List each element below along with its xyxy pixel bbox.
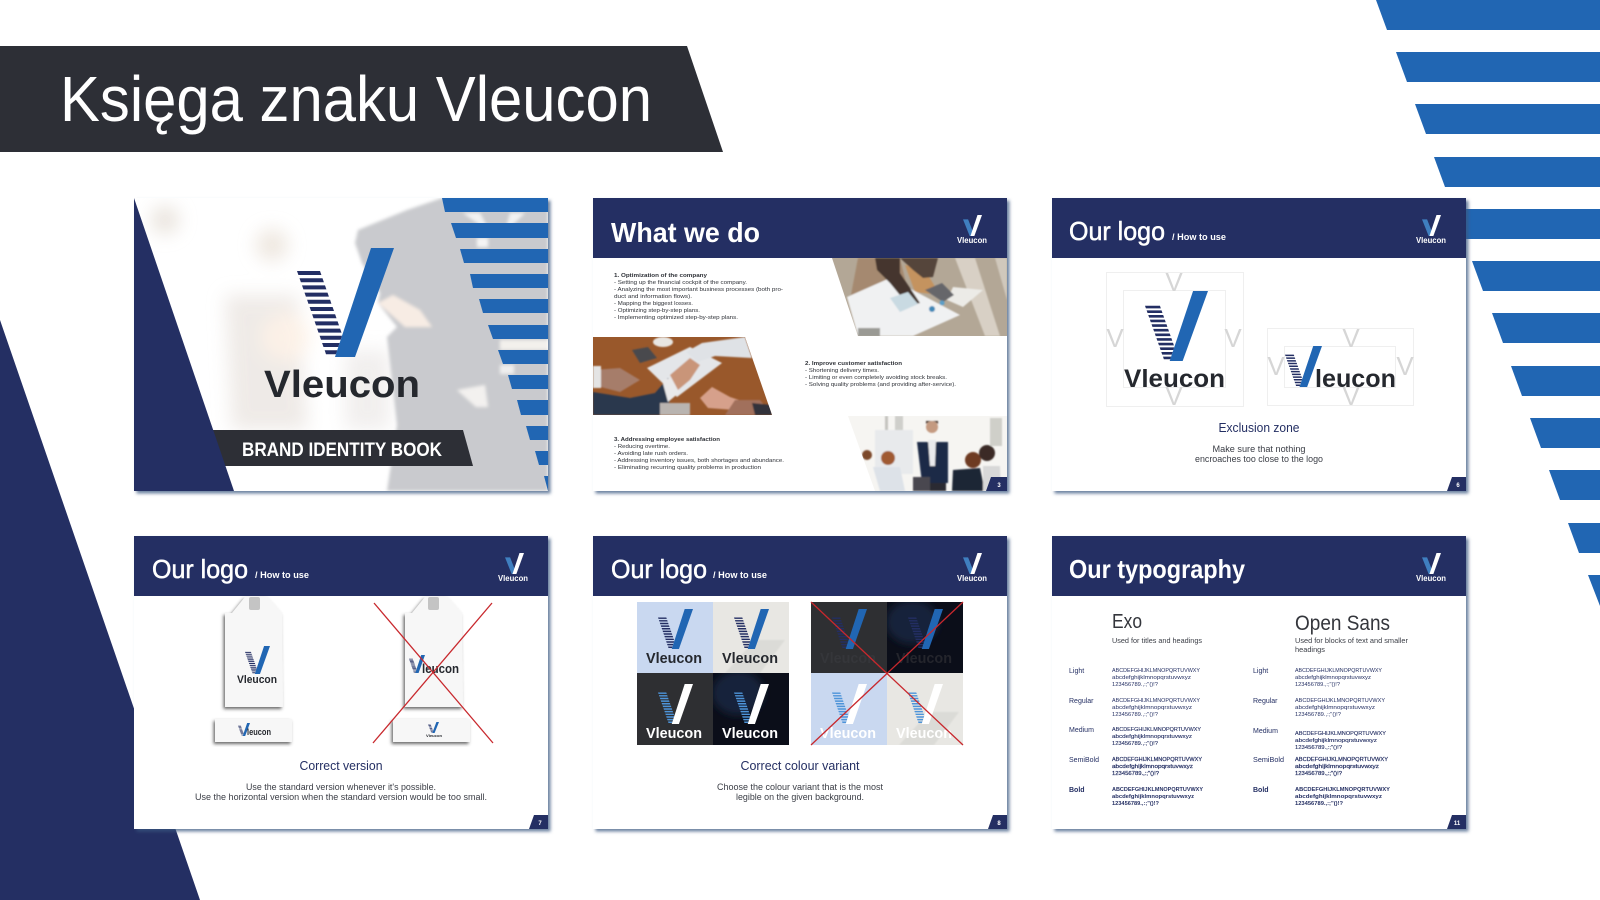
header bar <box>593 536 1007 596</box>
mockup: correct small card: leucon <box>247 727 271 737</box>
icon: mini logo <box>957 553 987 583</box>
body text: encroaches too close to the logo <box>1195 454 1323 464</box>
body text: legible on the given background. <box>736 792 864 802</box>
font column: Exo: 123456789.,:;"()!? <box>1112 712 1158 718</box>
panel: our logo correct version <box>134 536 548 829</box>
icon: mini logo <box>957 215 987 245</box>
text block: customer satisfaction <box>805 361 956 388</box>
font column: Exo: Medium <box>1069 727 1094 734</box>
page number tab: 11 <box>1454 821 1461 827</box>
exclusion diagram: vertical logo: V <box>1165 267 1183 297</box>
font column: Exo: abcdefghijklmnopqrstuvwxyz <box>1112 764 1193 770</box>
decoration: blue stripes top-right <box>1376 0 1600 606</box>
mockup: incorrect small card <box>393 719 470 742</box>
font column: Open Sans: Medium <box>1253 728 1278 735</box>
font column: Exo: Bold <box>1069 787 1085 794</box>
text block: optimization: - Analyzing the most important business processes (both pro- <box>614 287 783 293</box>
font column: Open Sans: ABCDEFGHIJKLMNOPQRTUVWXY <box>1295 757 1388 763</box>
font column: Open Sans: Bold <box>1253 787 1269 794</box>
page number tab <box>988 815 1007 829</box>
font column: Open Sans: ABCDEFGHIJKLMNOPQRTUVWXY <box>1295 731 1386 737</box>
body text <box>717 782 883 802</box>
panel: our logo colour variant <box>593 536 1007 829</box>
heading: our logo: Our logo <box>1069 216 1165 246</box>
header bar <box>134 536 548 596</box>
font column: Exo: abcdefghijklmnopqrstuvwxyz <box>1112 734 1192 740</box>
heading: our logo: Our logo <box>611 554 707 584</box>
heading: our logo <box>152 554 309 584</box>
icon: mini logo: Vleucon <box>498 573 528 583</box>
mockup: correct small card <box>215 719 292 742</box>
font column: Exo: 123456789.,:;"()!? <box>1112 771 1159 777</box>
font column: Open Sans: abcdefghijklmnopqrstuvwxyz <box>1295 738 1377 744</box>
font column: Exo: ABCDEFGHIJKLMNOPQRTUVWXY <box>1112 787 1203 793</box>
text block: employee satisfaction: 3. Addressing employee satisfaction <box>614 437 720 443</box>
text block: employee satisfaction: - Eliminating recurring quality problems in production <box>614 465 761 471</box>
panel: our logo exclusion zone <box>1052 198 1466 491</box>
exclusion diagram: horizontal logo <box>1267 323 1414 411</box>
font column: Exo: Light <box>1069 668 1084 675</box>
heading: our logo: Our logo <box>152 554 248 584</box>
text block: customer satisfaction: - Limiting or even completely avoiding stock breaks. <box>805 375 947 381</box>
logo wordmark: Vleucon <box>264 364 420 406</box>
font column: Exo: 123456789.,:;"()!? <box>1112 801 1160 807</box>
text block: employee satisfaction <box>614 437 784 471</box>
font column: Exo <box>1069 611 1203 807</box>
heading: our logo <box>611 554 767 584</box>
page number tab: 8 <box>997 821 1001 827</box>
icon: mini logo <box>498 553 528 583</box>
page number tab <box>1447 815 1466 829</box>
body text: Use the horizontal version when the standard version would be too small. <box>195 792 487 802</box>
exclusion diagram: vertical logo: V <box>1106 323 1124 353</box>
page number tab <box>986 477 1007 491</box>
logo grid: incorrect variants: Vleucon <box>896 725 952 742</box>
text block: customer satisfaction: - Solving quality problems (and providing after-service). <box>805 382 956 388</box>
icon: Vleucon logo mark <box>297 248 394 357</box>
font column: Exo: Regular <box>1069 698 1094 705</box>
font column: Open Sans: ABCDEFGHIJKLMNOPQRTUVWXY <box>1295 698 1385 704</box>
icon: mini logo: Vleucon <box>957 573 987 583</box>
body text <box>195 782 487 802</box>
font column: Open Sans: Regular <box>1253 698 1278 705</box>
decoration: navy triangle bottom-left <box>0 320 200 900</box>
heading: our logo: / How to use <box>713 570 767 581</box>
text block: customer satisfaction: 2. Improve customer satisfaction <box>805 361 902 367</box>
icon: mini logo: Vleucon <box>1416 235 1446 245</box>
font column: Open Sans: abcdefghijklmnopqrstuvwxyz <box>1295 764 1379 770</box>
title banner <box>0 46 723 152</box>
exclusion diagram: horizontal logo: V <box>1267 351 1285 381</box>
page number tab: 3 <box>997 483 1001 489</box>
icon: mini logo <box>1416 215 1446 245</box>
font column: Exo: abcdefghijklmnopqrstuvwxyz <box>1112 675 1191 681</box>
font column: Exo: ABCDEFGHIJKLMNOPQRTUVWXY <box>1112 668 1200 674</box>
exclusion diagram: vertical logo: V <box>1224 323 1242 353</box>
font column: Exo: Exo <box>1112 611 1142 633</box>
band: brand identity book: BRAND IDENTITY BOOK <box>242 440 442 461</box>
font column: Open Sans: abcdefghijklmnopqrstuvwxyz <box>1295 675 1371 681</box>
text block: optimization: 1. Optimization of the company <box>614 273 708 279</box>
font column: Open Sans: 123456789.,:;"()!? <box>1295 801 1344 807</box>
red cross <box>811 602 963 745</box>
subheading: correct version: Correct version <box>300 759 383 773</box>
panel: what we do <box>593 198 1008 492</box>
text block: optimization: - Implementing optimized step-by-step plans. <box>614 315 738 321</box>
heading: what we do: What we do <box>611 217 760 248</box>
font column: Open Sans: SemiBold <box>1253 757 1284 764</box>
mockup: incorrect badge <box>405 597 463 707</box>
exclusion diagram: horizontal logo: V <box>1396 351 1414 381</box>
logo grid: correct variants: Vleucon <box>722 650 778 667</box>
font column: Exo: 123456789.,:;"()!? <box>1112 682 1158 688</box>
photo: handshake <box>593 337 773 415</box>
font column: Exo: ABCDEFGHIJKLMNOPQRTUVWXY <box>1112 698 1200 704</box>
mockup: incorrect small card: Vleucon <box>426 733 443 738</box>
mockup: incorrect badge: leucon <box>422 661 459 676</box>
exclusion diagram: vertical logo: V <box>1165 381 1183 411</box>
logo grid: incorrect variants: Vleucon <box>820 725 876 742</box>
photo: documents on floor <box>830 258 1008 336</box>
logo grid: incorrect variants <box>811 600 963 745</box>
header bar <box>593 198 1007 258</box>
band: brand identity book <box>210 430 473 466</box>
text block: optimization: - Optimizing step-by-step plans. <box>614 308 700 314</box>
page number tab: 7 <box>538 821 542 827</box>
font column: Open Sans <box>1253 612 1408 807</box>
heading: our logo: / How to use <box>1172 232 1226 243</box>
body text: Choose the colour variant that is the most <box>717 782 883 792</box>
title banner: Księga znaku Vleucon <box>60 63 652 135</box>
navy triangle on cover <box>134 198 234 491</box>
font column: Open Sans: 123456789.,:;"()!? <box>1295 682 1340 688</box>
font column: Open Sans: Light <box>1253 668 1268 675</box>
mockup: correct badge: Vleucon <box>237 674 277 686</box>
exclusion diagram: vertical logo: Vleucon <box>1124 365 1225 393</box>
font column: Open Sans: Open Sans <box>1295 612 1390 635</box>
font column: Open Sans: ABCDEFGHIJKLMNOPQRTUVWXY <box>1295 668 1382 674</box>
font column: Exo: abcdefghijklmnopqrstuvwxyz <box>1112 794 1194 800</box>
body text <box>1195 444 1323 464</box>
font column: Open Sans: 123456789.,:;"()!? <box>1295 712 1341 718</box>
mockup: correct badge <box>225 597 283 707</box>
body text: Use the standard version whenever it's possible. <box>246 782 436 792</box>
panel: cover slide <box>134 198 548 491</box>
heading: our typography: Our typography <box>1069 554 1245 584</box>
page number tab: 6 <box>1456 483 1460 489</box>
exclusion diagram: horizontal logo: V <box>1342 323 1360 353</box>
page number tab <box>529 815 548 829</box>
heading: our logo <box>1069 216 1226 246</box>
logo grid: incorrect variants: Vleucon <box>896 650 952 667</box>
logo grid: correct variants: Vleucon <box>646 650 702 667</box>
font column: Open Sans: abcdefghijklmnopqrstuvwxyz <box>1295 705 1375 711</box>
text block: optimization <box>614 273 783 321</box>
logo grid: correct variants <box>637 602 789 745</box>
text block: optimization: duct and information flows). <box>614 294 692 300</box>
exclusion diagram: horizontal logo: V <box>1342 381 1360 411</box>
text block: employee satisfaction: - Avoiding late rush orders. <box>614 451 688 457</box>
font column: Exo: SemiBold <box>1069 757 1099 764</box>
header bar <box>1052 536 1466 596</box>
stripes on cover <box>442 198 548 491</box>
font column: Open Sans: abcdefghijklmnopqrstuvwxyz <box>1295 794 1382 800</box>
font column: Open Sans: 123456789.,:;"()!? <box>1295 771 1342 777</box>
font column: Exo: ABCDEFGHIJKLMNOPQRTUVWXY <box>1112 757 1202 763</box>
icon: mini logo: Vleucon <box>957 235 987 245</box>
header bar <box>1052 198 1466 258</box>
font column: Open Sans: Used for blocks of text and smaller <box>1295 636 1408 645</box>
panel: our typography <box>1052 536 1466 829</box>
logo grid: correct variants: Vleucon <box>646 725 702 742</box>
page number tab <box>1447 477 1466 491</box>
exclusion diagram: vertical logo <box>1106 267 1244 411</box>
icon: mini logo: Vleucon <box>1416 573 1446 583</box>
font column: Exo: abcdefghijklmnopqrstuvwxyz <box>1112 705 1192 711</box>
subheading: exclusion zone: Exclusion zone <box>1218 421 1300 435</box>
font column: Exo: ABCDEFGHIJKLMNOPQRTUVWXY <box>1112 727 1201 733</box>
text block: employee satisfaction: - Addressing inventory issues, both shortages and abundance. <box>614 458 784 464</box>
font column: Open Sans: 123456789.,:;"()!? <box>1295 745 1342 751</box>
font column: Exo: Used for titles and headings <box>1112 636 1202 645</box>
logo grid: incorrect variants: Vleucon <box>820 650 876 667</box>
photo: presenter meeting <box>848 416 1008 492</box>
text block: customer satisfaction: - Shortening delivery times. <box>805 368 879 374</box>
text block: employee satisfaction: - Reducing overtime. <box>614 444 670 450</box>
logo grid: correct variants: Vleucon <box>722 725 778 742</box>
font column: Open Sans: ABCDEFGHIJKLMNOPQRTUVWXY <box>1295 787 1390 793</box>
icon: mini logo <box>1416 553 1446 583</box>
body text: Make sure that nothing <box>1212 444 1306 454</box>
text block: optimization: - Mapping the biggest losses. <box>614 301 693 307</box>
exclusion diagram: horizontal logo: leucon <box>1315 365 1396 393</box>
font column: Exo: 123456789.,:;"()!? <box>1112 741 1158 747</box>
heading: our logo: / How to use <box>255 570 309 581</box>
subheading: correct colour variant: Correct colour variant <box>740 759 860 773</box>
red cross <box>373 603 493 743</box>
text block: optimization: - Setting up the financial cockpit of the company. <box>614 280 747 286</box>
font column: Open Sans: headings <box>1295 645 1325 654</box>
